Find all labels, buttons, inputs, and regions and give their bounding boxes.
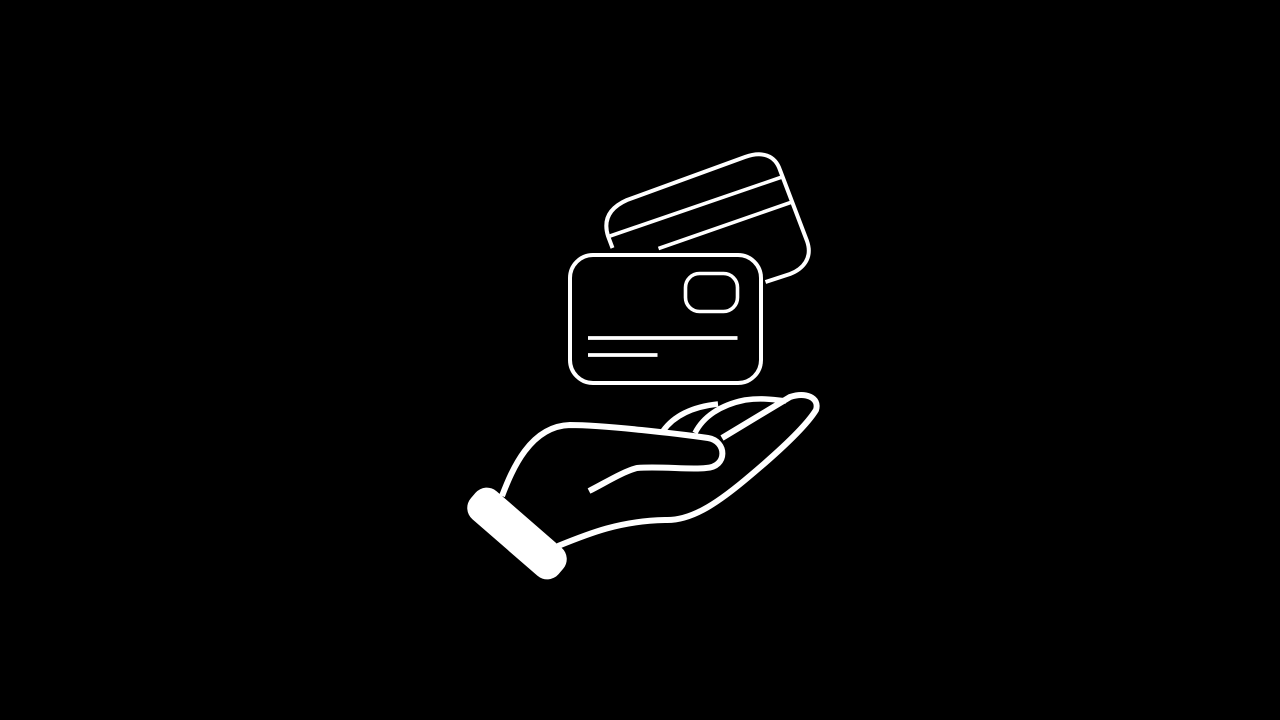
- icon: back credit card: [606, 154, 809, 282]
- card number line: [588, 336, 738, 340]
- hand cuff: [461, 481, 573, 586]
- icon: front credit card: [570, 255, 761, 383]
- card chip: [686, 274, 738, 312]
- hand back and thumb: [502, 425, 722, 496]
- card name line: [588, 353, 658, 357]
- icon: open hand: [461, 395, 817, 586]
- fingers: [663, 404, 718, 431]
- palm edge: [558, 395, 817, 546]
